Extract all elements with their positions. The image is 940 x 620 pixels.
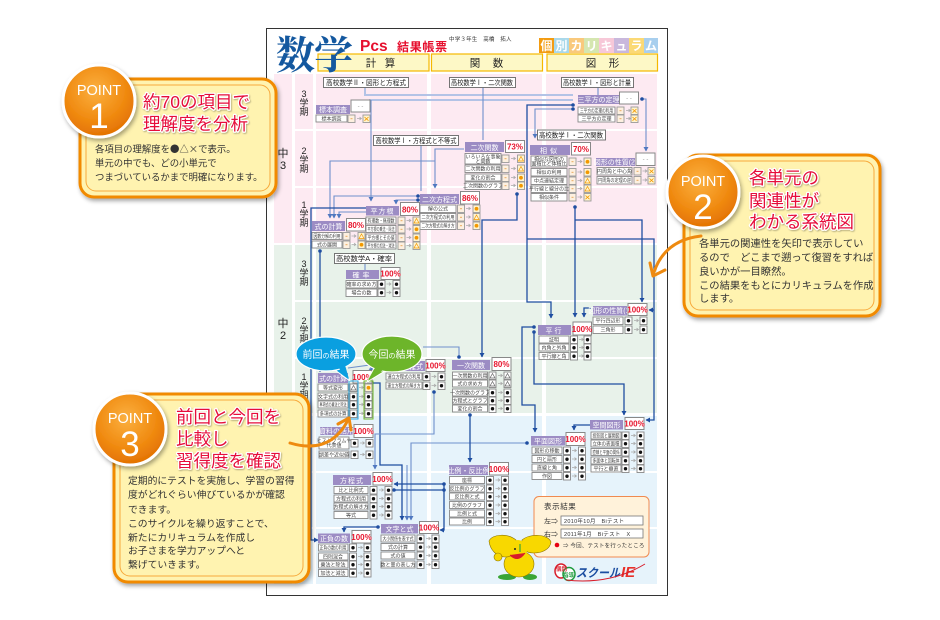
- heading: point 3: 前回と今回を: [176, 407, 281, 427]
- arrow: point 2 to chart: [650, 236, 701, 276]
- unit: 比例・反比例 100%: 比例と式: [457, 510, 477, 518]
- banner: 個別カリキュラム: カ: [570, 39, 583, 53]
- highlight: previous result column: [349, 381, 358, 419]
- term labels: 学: [299, 324, 309, 335]
- unit: 資料の活用 100%: ヒストグラムや: [317, 438, 351, 444]
- legend: 表示結果: 2011年1月 Biテスト X: [564, 530, 630, 538]
- unit: 二次関数 73%: 二次関数のグラフ: [463, 182, 503, 190]
- unit: 平面図形 100%: 直線と角: [537, 464, 557, 472]
- unit: 三平方の定理: - -: [626, 96, 632, 102]
- student name: 中学３年生 高橋 拓人: [449, 35, 512, 43]
- unit: 平方根 80%: 平方根: [370, 206, 394, 216]
- logo: スクールIE: [555, 564, 645, 581]
- panel: point 2 box: [684, 155, 880, 316]
- course label: 高校数学Ⅰ・二次関数: 高校数学Ⅰ・二次関数: [451, 78, 513, 87]
- grade labels: 3: [280, 160, 286, 172]
- grade labels: 2: [280, 330, 286, 342]
- term labels: 学: [299, 380, 309, 391]
- unit: 式の計算 80%: 式の計算: [314, 222, 342, 231]
- unit: 一次関数 80%: 方程式とグラフ: [452, 398, 488, 404]
- unit: 平面図形 100%: 円と扇形: [537, 456, 557, 463]
- unit: 比例・反比例 100%: 比例: [462, 518, 472, 526]
- heading: point 3: 習得度を確認: [176, 451, 281, 471]
- unit: 空間図形 100%: 直線と平面の関係: [592, 449, 620, 456]
- course label: 高校数学Ⅰ・図形と計量: 高校数学Ⅰ・図形と計量: [563, 78, 631, 87]
- unit: 二次関数 73%: と関数: [475, 158, 491, 165]
- unit: 方程式 100%: 方程式の利用: [336, 496, 366, 502]
- banner: 個別カリキュラム: リ: [585, 39, 598, 53]
- unit: 相似 70%: 相似の利用: [536, 169, 562, 176]
- unit: 方程式 100%: 方程式の解き方: [333, 504, 369, 510]
- panel: point 1 box: [80, 79, 276, 197]
- unit: 三平方の定理: 三平方の定理の利用: [580, 108, 613, 114]
- unit: 正負の数 100%: [318, 530, 372, 577]
- callout: POINT 3: [94, 393, 351, 582]
- body text: point 1: [95, 142, 263, 182]
- unit: 確率 100%: [346, 268, 401, 296]
- unit: 平行 100%: [538, 322, 592, 360]
- mascot: yellow elephant: [489, 535, 551, 580]
- course label: 高校数学Ⅰ・二次関数 second: 高校数学Ⅰ・二次関数: [539, 130, 603, 140]
- heading: point 3: 比較し: [176, 429, 228, 449]
- title: 数学: 数学: [276, 35, 353, 78]
- unit: 空間図形 100%: 空間図形: [592, 422, 620, 430]
- unit: 式の計算 80%: 因数分解の利用: [314, 233, 340, 240]
- unit: 図形の性質(1) 100%: 図形の性質(1): [588, 306, 632, 315]
- unit: 図形の性質(1) 100%: 100%: [627, 306, 648, 314]
- badge: POINT 2: [667, 156, 739, 228]
- unit: 連立方程式 100%: 100%: [425, 362, 446, 370]
- course label: 高校数学Ⅰ・図形と計量: [562, 78, 634, 88]
- heading: point 1: 理解度を分析: [143, 114, 248, 134]
- unit: 空間図形 100%: 平行と垂直: [593, 466, 619, 472]
- unit: 二次方程式 86%: 二次方程式: [422, 195, 457, 204]
- term labels: 3: [301, 259, 307, 269]
- unit: 方程式 100%: 方程式: [340, 476, 364, 485]
- column heading: 計算: [318, 54, 429, 71]
- unit: 比例・反比例 100%: 座標: [462, 477, 472, 484]
- body text: point 2: この結果をもとにカリキュラムを作成: [699, 279, 874, 292]
- unit: 一次関数 80%: 一次関数の利用: [452, 372, 488, 380]
- term labels: 学: [299, 97, 309, 108]
- banner: 個別カリキュラム: ム: [645, 39, 657, 53]
- unit: 平行 100%: 平行線と角: [541, 353, 567, 360]
- unit: 一次関数 80%: 一次関数のグラフ: [450, 390, 490, 396]
- unit: 資料の活用 100%: 代表値: [326, 442, 342, 449]
- unit: 図形の性質(2): 円周角の定理の逆: [598, 177, 631, 184]
- unit: 文字と式 100%: 式の計算: [388, 544, 408, 551]
- unit: 一次関数 80%: [450, 358, 511, 412]
- course label: 高校数学A・確率: 高校数学A・確率: [336, 254, 392, 263]
- unit: 比例・反比例 100%: 100%: [489, 465, 509, 474]
- unit: 相似 70%: 相似条件: [539, 194, 559, 201]
- unit: 正負の数 100%: 正負の数の利用: [320, 544, 346, 552]
- unit: 一次関数 80%: 一次関数: [457, 361, 485, 370]
- column heading: 関数: 数: [493, 56, 504, 70]
- unit: 空間図形 100%: 多面体と回転体: [592, 458, 620, 464]
- body text: point 1: 単元の中でも、どの小単元で: [95, 158, 217, 168]
- term labels: 2: [301, 316, 307, 326]
- course label: 高校数学Ⅱ・図形と方程式: [324, 78, 408, 88]
- heading: point 1: [143, 92, 250, 134]
- unit: 資料の活用 100%: 誤差や近似値: [319, 452, 349, 458]
- unit: 平方根 80%: 平方根の乗法・除法: [368, 226, 394, 233]
- unit: 平行 100%: 100%: [572, 325, 592, 334]
- unit: 平面図形 100%: 作図: [542, 473, 552, 480]
- badge: POINT 1: POINT: [77, 83, 121, 99]
- callout: POINT 1: [63, 65, 276, 197]
- unit: 式の計算 100%: 文字式の利用: [318, 394, 348, 400]
- term labels: 2: [301, 146, 307, 156]
- term labels: 期: [299, 218, 309, 228]
- body text: point 3: [128, 474, 295, 571]
- unit: 資料の活用 100%: 資料の活用: [319, 426, 354, 436]
- unit: 文字と式 100%: 式の値: [390, 552, 406, 560]
- unit: 確率 100%: 100%: [380, 270, 401, 278]
- unit: 二次関数 73%: いろいろな事象: [465, 154, 501, 160]
- badge: POINT 3: POINT: [108, 411, 152, 427]
- course label: 高校数学Ⅰ・方程式と不等式: 高校数学Ⅰ・方程式と不等式: [376, 136, 456, 145]
- body text: point 3: 定期的にテストを実施し、学習の習得: [128, 474, 295, 487]
- body text: point 1: 各項目の理解度を●△×で表示。: [95, 142, 236, 156]
- unit: 式の計算 100%: [318, 370, 373, 419]
- unit: 図形の性質(2): 円周角と中心角: [597, 168, 632, 175]
- grade labels: 中: [278, 317, 288, 330]
- unit: 一次関数 80%: 式の求め方: [457, 380, 483, 388]
- unit: 平面図形 100%: 図形の移動: [534, 448, 560, 454]
- unit: 二次関数 73%: 二次関数の利用: [465, 166, 501, 172]
- body text: point 3: 度がどれぐらい伸びているかが確認: [128, 488, 285, 501]
- unit: 平方根 80%: 有理数・無理数: [368, 218, 394, 224]
- legend: 表示結果: 表示結果: [544, 501, 576, 511]
- speech bubble: 今回の結果: 今回の結果: [368, 348, 416, 361]
- unit: 図形の性質(1) 100%: [588, 304, 648, 334]
- body text: point 3: このサイクルを繰り返すことで、: [128, 517, 274, 530]
- body text: point 2: します。: [699, 293, 739, 305]
- badge: POINT 1: 1: [89, 97, 109, 136]
- term labels: 期: [299, 390, 309, 400]
- body text: point 3: お子さまを学力アップへと: [128, 544, 245, 557]
- column heading: 計算: 算: [385, 56, 395, 70]
- unit: 平行 100%: 証明: [549, 336, 559, 344]
- unit: 比例・反比例 100%: [448, 462, 509, 526]
- unit: 式の計算 100%: 単項式の乗法と除法: [320, 402, 346, 408]
- term labels: 期: [299, 334, 309, 344]
- subtitle: Pcs 結果帳票: Pcs: [360, 38, 388, 55]
- unit: 標本調査: - -: [358, 104, 363, 110]
- unit: 二次関数 73%: 変化の割合: [470, 174, 496, 182]
- heading: point 3: [176, 407, 281, 471]
- column heading: 図形: 図: [586, 58, 596, 70]
- banner: 個別カリキュラム: [539, 38, 658, 53]
- unit: 空間図形 100%: 立体の表面積: [592, 440, 620, 448]
- unit: 標本調査: [316, 100, 370, 122]
- unit: 連立方程式 100%: 連立方程式の利用: [388, 374, 420, 380]
- unit: 三平方の定理: 三平方の定理: [578, 95, 620, 104]
- term labels: 1: [301, 200, 307, 210]
- heading: point 2: 各単元の: [749, 168, 819, 188]
- term labels: 1: [301, 372, 307, 382]
- unit: 相似 70%: 70%: [573, 145, 589, 154]
- unit: 相似 70%: 平行線と線分の比: [529, 186, 569, 192]
- unit: 二次方程式 86%: 二次方程式の解き方: [422, 222, 454, 230]
- term labels: [299, 89, 309, 400]
- heading: point 2: 関連性が: [749, 191, 819, 211]
- unit: 正負の数 100%: 正負の数: [320, 534, 348, 543]
- unit: 文字と式 100%: 数と量の表し方: [380, 562, 416, 568]
- legend: 表示結果: ⇒ 今回、テストを行ったところ: [563, 542, 645, 550]
- grade labels: [278, 147, 288, 342]
- term labels: 3: [301, 89, 307, 99]
- unit: 平方根 80%: 80%: [402, 206, 418, 214]
- unit: 一次関数 80%: 変化の割合: [457, 406, 483, 412]
- unit: 方程式 100%: 100%: [372, 475, 393, 484]
- unit: 空間図形 100%: 100%: [624, 420, 645, 428]
- unit: 式の計算 100%: 100%: [352, 373, 373, 382]
- unit: 平面図形 100%: 100%: [565, 435, 586, 444]
- banner: 個別カリキュラム: キ: [600, 39, 613, 53]
- banner: 個別カリキュラム: 別: [555, 39, 568, 53]
- unit: 確率 100%: 確率: [352, 270, 372, 280]
- term labels: 期: [299, 107, 309, 117]
- unit: 連立方程式 100%: 連立方程式の解き方: [388, 382, 420, 390]
- unit: 図形の性質(1) 100%: 三角形: [600, 326, 616, 334]
- unit: 二次方程式 86%: [420, 192, 480, 230]
- course label: 高校数学Ⅰ・二次関数 second: [538, 130, 606, 140]
- unit: 二次関数 73%: 二次関数: [470, 143, 498, 152]
- term labels: 学: [299, 267, 309, 278]
- badge: POINT 2: 2: [693, 188, 713, 227]
- banner: 個別カリキュラム: 個: [540, 39, 553, 53]
- report sheet: [266, 28, 668, 596]
- unit: 文字と式 100%: 100%: [419, 524, 439, 532]
- column heading: 関数: [432, 54, 542, 71]
- unit: 正負の数 100%: 加法と減法: [320, 570, 346, 577]
- heading: point 2: [749, 168, 854, 232]
- unit: 相似 70%: 相似な図形の: [534, 156, 564, 163]
- column heading: 図形: [547, 54, 658, 71]
- unit: 文字と式 100%: [380, 522, 439, 568]
- course label: 高校数学Ⅰ・方程式と不等式: [374, 136, 458, 146]
- unit: 文字と式 100%: 文字と式: [386, 524, 414, 534]
- unit: 式の計算 100%: 式の計算: [319, 374, 347, 383]
- unit: 平方根 80%: [366, 202, 420, 250]
- unit: 平面図形 100%: [531, 432, 586, 480]
- badge: POINT 3: 3: [120, 425, 140, 464]
- grid: study-term background cells: [274, 74, 657, 584]
- course label: 高校数学Ⅱ・図形と方程式: 高校数学Ⅱ・図形と方程式: [326, 78, 406, 87]
- unit: 確率 100%: 確率の求め方: [346, 281, 377, 288]
- unit: 相似 70%: 面積比と体積比: [531, 160, 567, 168]
- body text: point 1: つまづいているかまで明確になります。: [95, 172, 263, 182]
- unit: 二次方程式 86%: 86%: [462, 194, 478, 203]
- unit: 図形の性質(1) 100%: 平行四辺形: [595, 318, 621, 324]
- unit: 比例・反比例 100%: 反比例のグラフ: [449, 486, 485, 492]
- unit: 三平方の定理: 三平方の定理: [581, 116, 612, 122]
- unit: 正負の数 100%: 四則混合: [323, 554, 343, 560]
- body text: point 3: 新たにカリキュラムを作成し: [128, 532, 255, 544]
- callout: POINT 2: [650, 155, 880, 316]
- unit: 標本調査: 標本調査: [319, 105, 347, 114]
- unit: 資料の活用 100%: [317, 424, 374, 458]
- speech bubble: 前回の結果: [296, 337, 356, 381]
- unit: 式の計算 80%: [312, 218, 366, 248]
- unit: 正負の数 100%: 乗法と除法: [320, 562, 346, 568]
- unit: 図形の性質(2): 図形の性質(2): [594, 158, 637, 166]
- unit: 方程式 100%: 比と比例式: [338, 487, 364, 494]
- unit: 式の計算 100%: 等式変形: [323, 384, 343, 392]
- unit: 相似 70%: [529, 142, 591, 201]
- term labels: 学: [299, 208, 309, 219]
- unit: 二次関数 73%: 73%: [507, 142, 523, 152]
- unit: 平行 100%: 平行: [546, 326, 564, 335]
- banner: 個別カリキュラム: ュ: [615, 39, 628, 53]
- unit: 相似 70%: 相似: [540, 146, 560, 155]
- legend: 表示結果: 右⇒: [544, 530, 558, 538]
- term labels: 期: [299, 277, 309, 287]
- heading: point 2: わかる系統図: [749, 212, 854, 232]
- unit: 比例・反比例 100%: 比例のグラフ: [452, 502, 482, 509]
- unit: 確率 100%: 場合の数: [351, 290, 372, 296]
- term labels: 学: [299, 154, 309, 165]
- unit: 連立方程式 100%: [386, 360, 446, 390]
- column heading: 関数: 関: [470, 58, 480, 70]
- body text: point 2: 各単元の関連性を矢印で表示してい: [699, 237, 863, 250]
- unit: 相似 70%: 中点連結定理: [534, 178, 564, 184]
- heading: point 1: 約70の項目で: [143, 92, 250, 112]
- speech bubble: 前回の結果: 前回の結果: [302, 348, 350, 361]
- unit: 式の計算 80%: 式の展開: [317, 242, 337, 248]
- badge: POINT 1: [63, 65, 135, 137]
- unit: 式の計算 80%: 80%: [348, 221, 364, 230]
- course label: 高校数学Ⅰ・二次関数: [450, 78, 516, 88]
- unit: 方程式 100%: [333, 472, 393, 519]
- unit: 二次方程式 86%: 解の公式: [428, 206, 448, 212]
- speech bubble: 今回の結果: [362, 336, 422, 382]
- unit: 標本調査: 標本調査: [321, 116, 342, 122]
- legend: 表示結果: [534, 496, 649, 557]
- banner: 個別カリキュラム: ラ: [630, 39, 643, 53]
- unit: 図形の性質(2): - -: [643, 157, 648, 163]
- logo: スクールIE: スクール: [576, 566, 621, 580]
- highlight: current result column: [364, 381, 373, 419]
- badge: POINT 2: POINT: [681, 174, 725, 190]
- body text: point 2: るので どこまで遡って復習をすれば: [699, 251, 873, 264]
- body text: point 2: [699, 237, 874, 305]
- unit: 比例・反比例 100%: 比例・反比例: [448, 466, 490, 475]
- panel: point 3 box: [114, 394, 309, 582]
- body text: point 3: できます。: [128, 504, 176, 516]
- subtitle: Pcs 結果帳票: 結果帳票: [397, 39, 448, 54]
- term labels: 期: [299, 164, 309, 174]
- body text: point 2: 良いかが一目瞭然。: [699, 265, 792, 278]
- course label: 高校数学A・確率: [334, 254, 394, 264]
- unit: 資料の活用 100%: 100%: [353, 427, 374, 436]
- logo: スクールIE: 指導: [563, 571, 575, 579]
- unit: 三平方の定理: [578, 92, 638, 122]
- unit: 文字と式 100%: 大小関係を表す式: [382, 536, 414, 542]
- unit: 方程式 100%: 等式: [346, 512, 356, 519]
- unit: 式の計算 100%: 多項式の計算: [320, 410, 346, 418]
- unit: 連立方程式 100%: 連立方程式: [388, 362, 423, 371]
- unit: 一次関数 80%: 80%: [493, 360, 510, 369]
- unit: 二次関数 73%: [463, 140, 524, 190]
- column heading: 図形: 形: [609, 58, 620, 70]
- unit: 空間図形 100%: [590, 418, 645, 472]
- unit: 正負の数 100%: 100%: [351, 533, 372, 542]
- unit: 図形の性質(2): [594, 153, 655, 184]
- arrow: point 3 to results: [290, 418, 351, 446]
- unit: 比例・反比例 100%: 反比例と式: [454, 494, 480, 500]
- grade labels: 中: [278, 147, 288, 160]
- unit: 平方根 80%: 平方根の加法・減法: [368, 242, 394, 250]
- unit: 平行 100%: 内角と外角: [541, 344, 567, 352]
- unit: 二次方程式 86%: 二次方程式の利用: [422, 214, 454, 221]
- subtitle: Pcs 結果帳票: [360, 38, 448, 55]
- logo: スクールIE: IE: [621, 564, 636, 581]
- connector lines between units: [311, 87, 654, 540]
- unit: 平面図形 100%: 平面図形: [534, 438, 562, 446]
- logo: スクールIE: 個別: [556, 565, 568, 573]
- unit: 平方根 80%: 平方根とその値: [368, 234, 394, 242]
- legend: 表示結果: 左⇒: [544, 516, 558, 526]
- legend: 表示結果: 2010年10月 Biテスト: [564, 517, 624, 525]
- column heading: 計算: 計: [366, 58, 377, 70]
- badge: POINT 3: [94, 393, 166, 465]
- body text: point 3: 繋げていきます。: [128, 558, 205, 571]
- unit: 空間図形 100%: 投影図と展開図: [592, 432, 620, 440]
